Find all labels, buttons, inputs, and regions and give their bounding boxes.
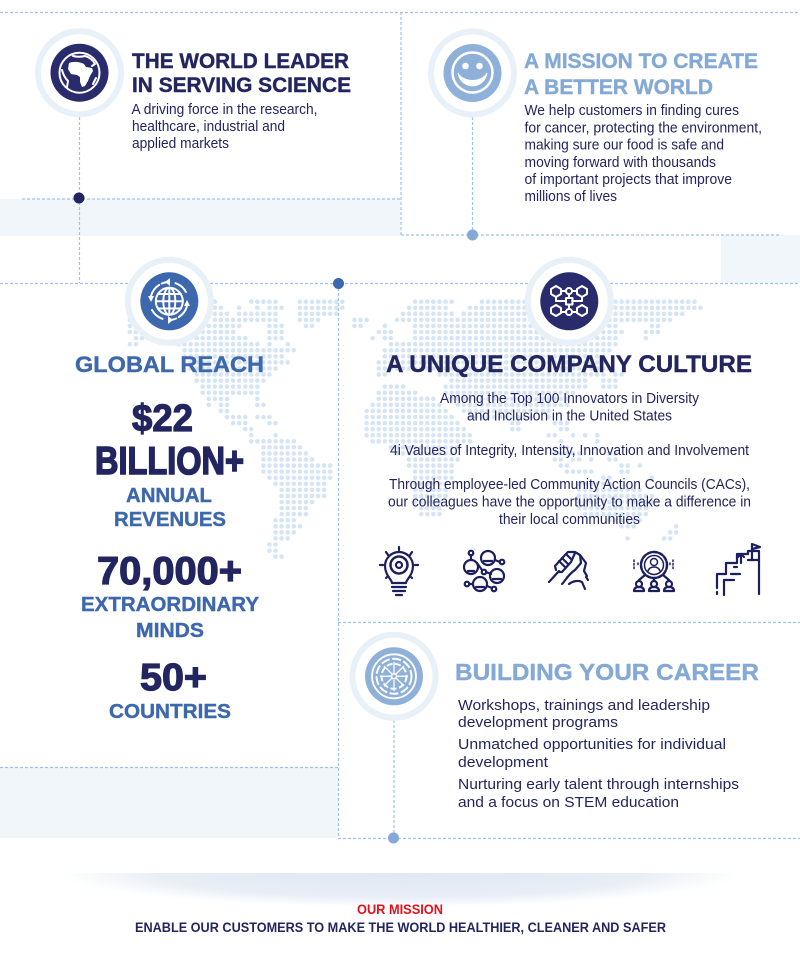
icon: earth xyxy=(35,28,124,117)
text: driving force xyxy=(132,102,318,152)
footer: our mission: OUR MISSION xyxy=(357,902,443,917)
heading: the world leader xyxy=(132,49,351,97)
icon: arm wrestling handshake xyxy=(549,552,588,589)
heading: a mission: A BETTER WORLD xyxy=(524,75,713,99)
text: mission body: millions of lives xyxy=(524,189,617,205)
heading: a mission: A MISSION TO CREATE xyxy=(524,49,758,73)
stat: countries: COUNTRIES xyxy=(109,700,231,723)
stat: countries: 50+ xyxy=(140,657,207,699)
text: culture body: 4i Values of Integrity, Intensity, Innovation and Involvement xyxy=(390,443,749,459)
text: mission body: moving forward with thousands xyxy=(524,155,716,171)
heading: building your career: BUILDING YOUR CAREER xyxy=(455,659,759,685)
text: career body: Nurturing early talent through internships xyxy=(458,777,739,793)
stat: revenues: BILLION+ xyxy=(95,440,244,483)
footer shadow xyxy=(60,873,740,907)
icon: people network xyxy=(464,551,504,591)
footer: our mission: ENABLE OUR CUSTOMERS TO MAKE THE WORLD HEALTHIER, CLEANER AND SAFER xyxy=(135,920,666,935)
background panel bottom left xyxy=(0,767,338,838)
dotted world map xyxy=(130,302,701,557)
text: driving force: applied markets xyxy=(132,136,229,152)
text: culture body: Among the Top 100 Innovators in Diversity xyxy=(440,391,700,407)
heading: company culture: A UNIQUE COMPANY CULTURE xyxy=(386,351,752,378)
node: global reach xyxy=(333,278,344,289)
text: mission body xyxy=(524,103,762,205)
text: driving force: A driving force in the research, xyxy=(132,102,318,118)
text: culture body: their local communities xyxy=(499,512,640,528)
node: career xyxy=(388,832,399,844)
background band right xyxy=(721,235,800,283)
text: career body: and a focus on STEM education xyxy=(458,795,679,811)
heading: a mission xyxy=(524,49,758,99)
icon: stairs with flag xyxy=(717,544,760,595)
stat: revenues: ANNUAL xyxy=(126,484,212,507)
text: career body: development xyxy=(458,755,548,771)
icon: network cube xyxy=(525,257,614,346)
icon: rotating globe xyxy=(125,257,214,346)
text: culture body: Through employee-led Community Action Councils (CACs), xyxy=(389,477,750,493)
node: first section xyxy=(74,192,84,204)
stat: countries xyxy=(109,657,231,723)
text: career body: Workshops, trainings and leadership xyxy=(458,698,710,714)
text: culture body xyxy=(388,391,751,528)
stat: minds xyxy=(81,550,259,642)
heading: the world leader: IN SERVING SCIENCE xyxy=(132,73,351,97)
text: mission body: for cancer, protecting the environment, xyxy=(524,120,762,136)
stat: revenues xyxy=(95,398,244,531)
stat: minds: EXTRAORDINARY xyxy=(81,593,259,616)
text: mission body: making sure our food is safe and xyxy=(524,138,724,154)
heading: the world leader: THE WORLD LEADER xyxy=(132,49,349,73)
icon: team gear xyxy=(634,552,674,591)
text: mission body: We help customers in finding cures xyxy=(524,103,739,119)
text: career body: development programs xyxy=(458,715,618,731)
icon: idea bulb xyxy=(380,547,418,595)
text: culture body: our colleagues have the opportunity to make a difference in xyxy=(388,494,751,510)
node: mission section xyxy=(467,230,478,240)
text: culture body: and Inclusion in the United States xyxy=(467,408,672,424)
text: career body: Unmatched opportunities for individual xyxy=(458,737,726,753)
stat: revenues: REVENUES xyxy=(114,508,226,531)
background band left xyxy=(0,199,400,236)
footer: our mission xyxy=(135,902,666,935)
stat: revenues: $22 xyxy=(132,398,193,440)
heading: global reach: GLOBAL REACH xyxy=(75,352,264,377)
text: career body xyxy=(458,698,739,811)
icon: smile xyxy=(428,28,517,118)
stat: minds: MINDS xyxy=(136,619,204,642)
stat: minds: 70,000+ xyxy=(97,550,242,593)
icon: target wheel xyxy=(350,632,438,721)
text: driving force: healthcare, industrial and xyxy=(132,119,285,135)
text: mission body: of important projects that improve xyxy=(524,172,732,188)
